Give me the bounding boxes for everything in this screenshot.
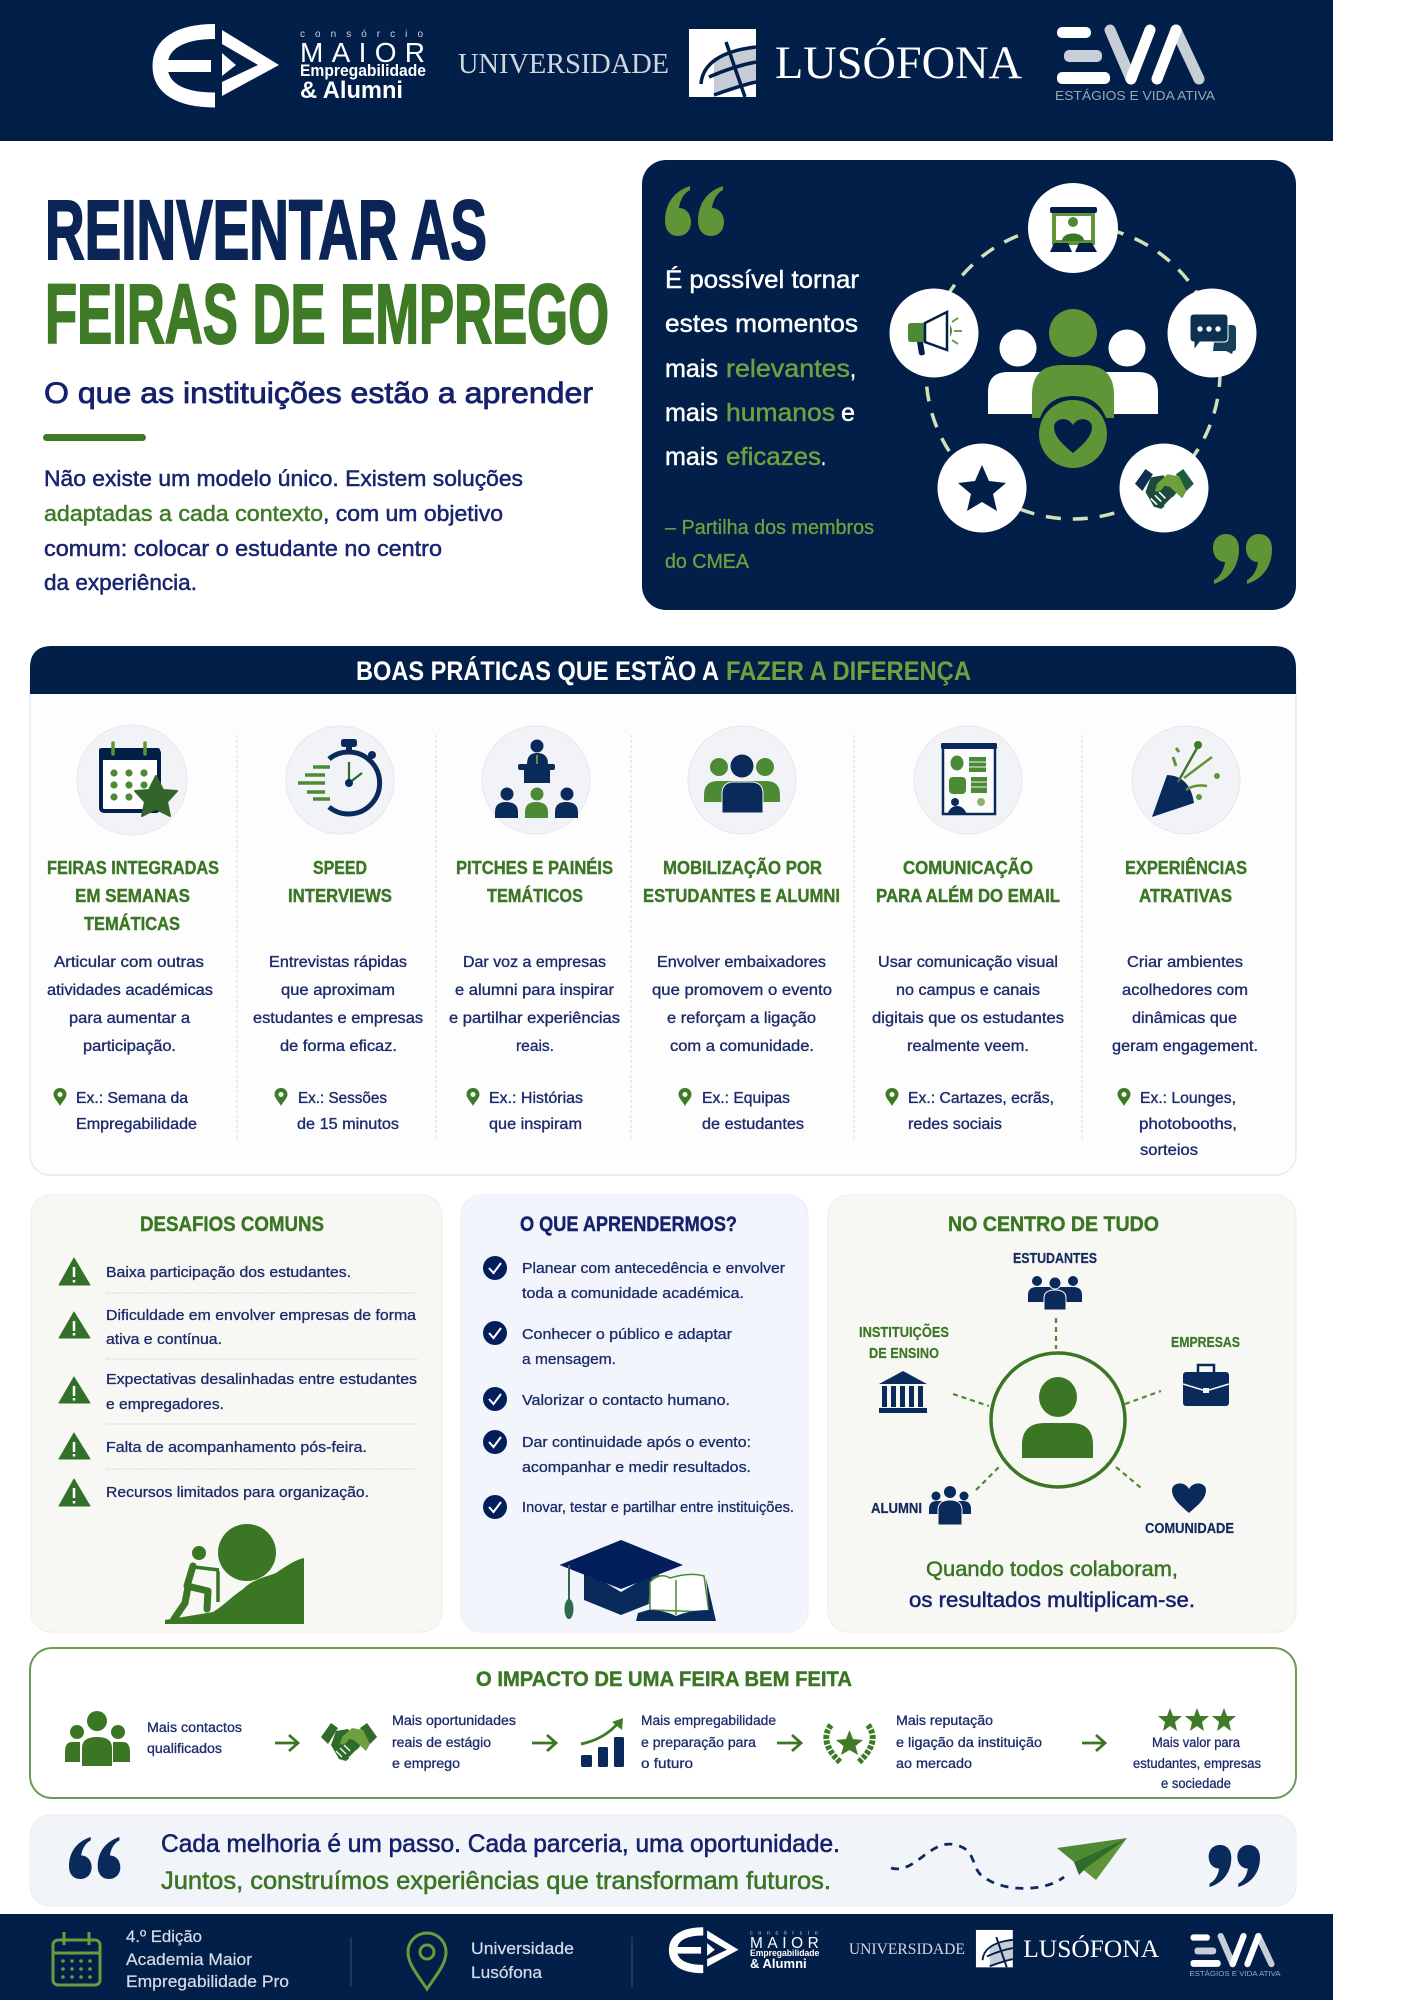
heading [288,857,392,906]
description: atividades académicas [47,982,213,999]
quote text [665,265,859,471]
item 4: Dar continuidade após o evento: [522,1435,751,1451]
step 4: Mais reputação [896,1713,993,1728]
intro paragraph: da experiência. [44,570,197,595]
description [872,954,1064,1055]
node: instituições de ensino: INSTITUIÇÕES [859,1323,949,1341]
step 3: Mais empregabilidade [641,1713,776,1728]
description: que aproximam [281,982,395,999]
example: photobooths, [1139,1116,1237,1133]
icon: party popper [1132,726,1240,834]
icon: opening quote [69,1837,120,1879]
description: Dar voz a empresas [463,954,606,971]
example: Ex.: Semana da [76,1090,188,1107]
description: participação. [83,1038,176,1055]
panel: closing quote [30,1815,1296,1906]
heading: EM SEMANAS [75,885,190,906]
description: que promovem o evento [652,982,832,999]
icon: megaphone [890,288,978,378]
diagram: collaboration ring [890,183,1256,532]
heading: O IMPACTO DE UMA FEIRA BEM FEITA [476,1668,852,1691]
quote text: É possível tornar [665,265,859,294]
message: Juntos, construímos experiências que transformam futuros. [161,1867,831,1895]
panel: quote [642,160,1296,610]
step 4 [826,1713,1042,1771]
item 2 [59,1308,417,1348]
item 3: e empregadores. [106,1397,224,1413]
example: que inspiram [489,1116,582,1133]
heading [876,857,1060,906]
description [652,954,832,1055]
description [47,954,213,1055]
description: Entrevistas rápidas [269,954,407,971]
description: Envolver embaixadores [657,954,826,971]
logo: EVA [1055,27,1215,103]
heading: PARA ALÉM DO EMAIL [876,885,1060,906]
step 4: e ligação da instituição [896,1735,1042,1750]
step 2 [321,1713,516,1771]
icon: chat bubbles [1168,288,1256,378]
step 2: e emprego [392,1756,460,1771]
title: REINVENTAR AS [45,183,487,277]
logo: Consórcio Maior: MAIOR [300,37,425,68]
location text: Lusófona [471,1963,543,1982]
item 2 [483,1321,732,1368]
heading: PITCHES E PAINÉIS [456,857,613,878]
header band with logos [0,0,1333,141]
logo: EVA small [1189,1934,1281,1978]
panel: no centro de tudo [828,1195,1296,1632]
event info [126,1927,289,1991]
item 4 [59,1433,367,1459]
quote attribution: do CMEA [665,551,750,573]
icon: calendar with star [77,725,187,835]
panel: o impacto [30,1648,1296,1798]
title: FEIRAS DE EMPREGO [45,267,609,361]
node: instituições de ensino [859,1323,949,1413]
logo: Consórcio Maior small: Empregabilidade [750,1948,819,1958]
heading: O QUE APRENDERMOS? [520,1213,737,1236]
logo: Consórcio Maior [160,29,426,104]
heading: COMUNICAÇÃO [903,857,1033,878]
message [161,1830,840,1895]
description: acolhedores com [1122,982,1248,999]
quote text: e [841,399,855,427]
example [466,1088,583,1133]
subtitle: O que as instituições estão a aprender [44,377,593,410]
column: speed interviews [253,726,423,1133]
item 4 [483,1430,751,1476]
quote text: , [850,355,856,383]
icon: group of people [688,726,796,834]
intro paragraph: , com um objetivo [323,501,503,526]
icon: closing quote [1209,1845,1260,1887]
quote text: relevantes [726,355,850,383]
title [45,183,609,361]
item 1 [483,1256,785,1302]
example [274,1088,399,1133]
icon: poster board [914,726,1022,834]
description: dinâmicas que [1132,1010,1237,1027]
step 2: reais de estágio [392,1735,491,1750]
logo: Universidade Lusófona small [849,1930,1159,1967]
section header bar [30,646,1296,694]
example: Ex.: Lounges, [1140,1090,1236,1107]
quote text: estes momentos [665,310,858,338]
step 5 [1133,1708,1261,1791]
step 3: e preparação para [641,1735,757,1750]
panel: boas práticas [30,646,1296,1175]
logo: Universidade Lusófona small: UNIVERSIDADE [849,1941,965,1958]
example: Ex.: Histórias [489,1090,583,1107]
description: Criar ambientes [1127,954,1243,971]
event info: 4.º Edição [126,1927,202,1946]
item 5 [59,1479,369,1506]
logo: EVA: ESTÁGIOS E VIDA ATIVA [1055,88,1215,103]
icon: location pin [408,1933,446,1989]
section header bar: FAZER A DIFERENÇA [726,656,971,686]
icon: speaker and audience [482,726,590,834]
icon: stopwatch [286,726,394,834]
message: Cada melhoria é um passo. Cada parceria, uma oportunidade. [161,1830,840,1858]
arrow [532,1735,556,1751]
heading: TEMÁTICAS [84,913,180,934]
logo: Universidade Lusófona small: LUSÓFONA [1023,1934,1159,1963]
description: Articular com outras [54,954,204,971]
item 2: Dificuldade em envolver empresas de forma [106,1308,417,1324]
item 3 [59,1372,417,1413]
description: geram engagement. [1112,1038,1258,1055]
logo: Consórcio Maior small [673,1930,819,1971]
item 2: ativa e contínua. [106,1332,222,1348]
description: estudantes e empresas [253,1010,423,1027]
section header bar: BOAS PRÁTICAS QUE ESTÃO A [356,655,719,686]
step 1: qualificados [147,1741,222,1756]
quote attribution [665,517,874,573]
location text [471,1939,574,1982]
description: Usar comunicação visual [878,954,1058,971]
icon: star [938,444,1026,532]
description: com a comunidade. [670,1038,814,1055]
quote attribution: – Partilha dos membros [665,517,874,539]
description: e alumni para inspirar [455,982,614,999]
logo: EVA small: ESTÁGIOS E VIDA ATIVA [1189,1969,1281,1978]
event info: Academia Maior [126,1950,252,1969]
logo: Consórcio Maior small: & Alumni [750,1956,807,1971]
heading: MOBILIZAÇÃO POR [663,857,822,878]
description: realmente veem. [907,1038,1029,1055]
icon: central people with heart [988,309,1158,468]
step 5: estudantes, empresas [1133,1756,1261,1771]
item 1: Baixa participação dos estudantes. [106,1265,351,1281]
item 3: Expectativas desalinhadas entre estudantes [106,1372,417,1388]
example: de 15 minutos [297,1116,399,1133]
description: digitais que os estudantes [872,1010,1064,1027]
example [1118,1088,1237,1159]
item 2: a mensagem. [522,1352,616,1368]
footer band [0,1914,1333,2000]
quote text: eficazes [726,443,821,471]
step 1: Mais contactos [147,1720,242,1735]
closing message: os resultados multiplicam-se. [909,1589,1195,1612]
item 1 [59,1258,351,1285]
icon: paper plane with dashed path [891,1838,1127,1888]
item 1: toda a comunidade académica. [522,1286,744,1302]
description [253,954,423,1055]
heading: ATRATIVAS [1139,885,1232,906]
logo: Universidade Lusófona: LUSÓFONA [775,37,1022,89]
logo: Universidade Lusófona [458,29,1022,97]
location text: Universidade [471,1939,574,1958]
quote text: mais [665,443,725,471]
item 5 [483,1495,794,1519]
column: comunicação [872,726,1064,1133]
example: sorteios [1140,1142,1198,1159]
logo: Consórcio Maior small: MAIOR [750,1935,819,1952]
accent bar [43,434,146,441]
example: Empregabilidade [76,1116,197,1133]
step 3 [581,1713,776,1771]
node: alumni: ALUMNI [871,1501,922,1517]
heading: SPEED [313,857,367,878]
intro paragraph: adaptadas a cada contexto [44,501,323,526]
heading: NO CENTRO DE TUDO [948,1213,1159,1236]
icon: graduation cap and book [560,1540,716,1621]
intro paragraph [44,466,523,595]
quote text: mais [665,399,725,427]
description: no campus e canais [896,982,1040,999]
heading: FEIRAS INTEGRADAS [47,857,219,878]
closing message: Quando todos colaboram, [926,1558,1178,1581]
quote text: mais [665,355,725,383]
icon: handshake [1120,444,1208,532]
step 1 [65,1711,242,1766]
icon: closing quote [1213,534,1272,584]
step 2: Mais oportunidades [392,1713,516,1728]
item 2: Conhecer o público e adaptar [522,1327,732,1343]
quote text: . [821,443,826,471]
column: mobilização [643,726,840,1133]
column: experiências [1112,726,1258,1159]
example: Ex.: Cartazes, ecrãs, [908,1090,1054,1107]
central person ring [991,1353,1125,1487]
description: para aumentar a [69,1010,190,1027]
description: reais. [516,1038,554,1055]
item 3 [483,1387,730,1411]
description: e partilhar experiências [449,1010,620,1027]
node: alumni [871,1486,971,1525]
step 5: e sociedade [1161,1776,1231,1791]
event info: Empregabilidade Pro [126,1972,289,1991]
logo: Consórcio Maior small: consórcio [750,1930,818,1936]
example: Ex.: Sessões [298,1090,387,1107]
arrow [777,1735,801,1751]
icon: opening quote [665,186,724,236]
logo: Universidade Lusófona: UNIVERSIDADE [458,49,669,80]
heading: INTERVIEWS [288,885,392,906]
column: feiras integradas [47,725,219,1133]
arrow [275,1735,298,1751]
example [54,1088,197,1133]
icon: calendar [53,1932,100,1985]
column: pitches e painéis [449,726,620,1133]
logo: Consórcio Maior: & Alumni [300,77,403,104]
heading: ESTUDANTES E ALUMNI [643,885,840,906]
intro paragraph: comum: colocar o estudante no centro [44,536,442,561]
heading: DESAFIOS COMUNS [140,1213,324,1236]
description: e reforçam a ligação [667,1010,816,1027]
description [449,954,620,1055]
step 5: Mais valor para [1152,1735,1240,1750]
intro paragraph: Não existe um modelo único. Existem soluções [44,466,523,491]
item 3: Valorizar o contacto humano. [522,1393,730,1409]
heading: TEMÁTICOS [487,885,583,906]
heading [1125,857,1247,906]
arrow [1082,1735,1105,1751]
example: Ex.: Equipas [702,1090,790,1107]
node: instituições de ensino: DE ENSINO [869,1346,939,1362]
example [678,1088,804,1133]
panel: o que aprendermos [461,1195,808,1632]
node: comunidade [1145,1483,1234,1537]
heading [47,857,219,934]
example: redes sociais [908,1116,1002,1133]
step 4: ao mercado [896,1756,972,1771]
item 4: acompanhar e medir resultados. [522,1460,751,1476]
node: comunidade: COMUNIDADE [1145,1521,1234,1537]
quote text: humanos [726,399,835,427]
closing message [909,1558,1195,1612]
panel: desafios comuns [31,1195,442,1632]
item 5: Recursos limitados para organização. [106,1485,369,1501]
logo: Consórcio Maior: Empregabilidade [300,61,426,80]
description [1112,954,1258,1055]
node: estudantes: ESTUDANTES [1013,1251,1097,1267]
node: empresas [1171,1335,1240,1406]
item 1: Planear com antecedência e envolver [522,1261,785,1277]
example: de estudantes [702,1116,804,1133]
description: de forma eficaz. [280,1038,397,1055]
heading [456,857,613,906]
heading: EXPERIÊNCIAS [1125,857,1247,878]
icon: person pushing boulder uphill [165,1524,304,1624]
logo: Consórcio Maior: consórcio [300,29,423,40]
node: empresas: EMPRESAS [1171,1335,1240,1351]
icon: presentation [1028,183,1118,273]
step 3: o futuro [641,1756,693,1771]
node: estudantes [1013,1251,1097,1310]
item 5: Inovar, testar e partilhar entre instituições. [522,1500,794,1516]
example [886,1088,1054,1133]
item 4: Falta de acompanhamento pós-feira. [106,1440,367,1456]
heading [643,857,840,906]
